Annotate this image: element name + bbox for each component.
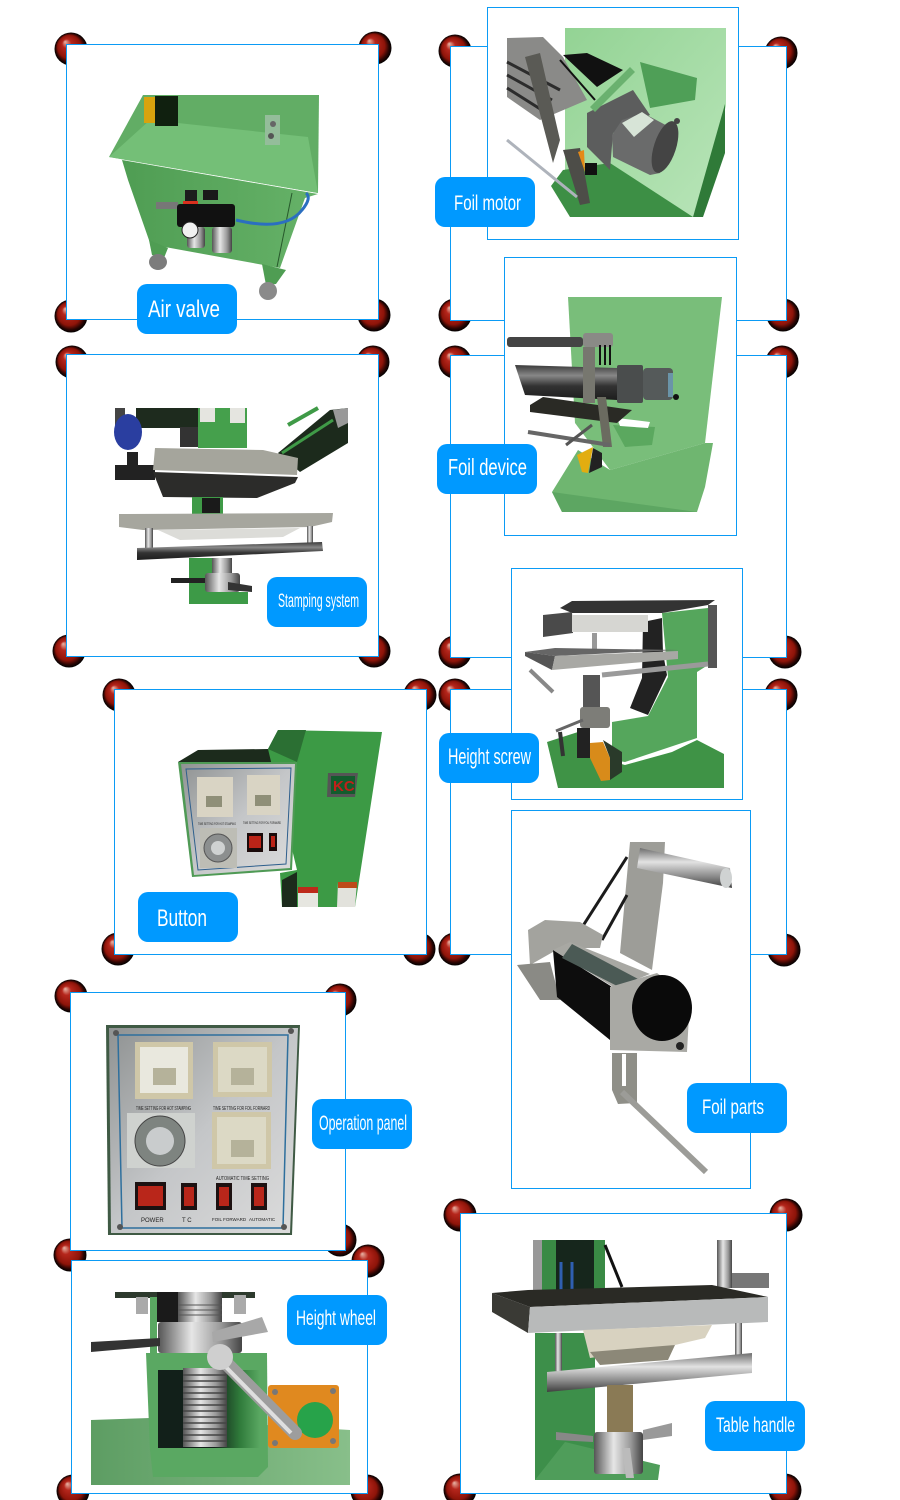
photo: control panel: AUTOMATIC bbox=[249, 1217, 276, 1222]
panel: table handle bbox=[444, 1198, 805, 1500]
label: button bbox=[138, 892, 238, 942]
photo: table handle bbox=[492, 1240, 769, 1480]
photo: air valve cabinet bbox=[109, 95, 319, 300]
panel: height screw backing bbox=[438, 678, 800, 966]
photo: control box: TIME SETTING FOR HOT STAMPING bbox=[198, 822, 236, 826]
label: operation panel: Operation panel bbox=[319, 1112, 407, 1135]
label: stamping system: Stamping system bbox=[278, 591, 359, 612]
photo: height wheel bbox=[91, 1292, 350, 1485]
photo: control box bbox=[178, 730, 382, 907]
label: height wheel bbox=[287, 1295, 387, 1345]
photo: foil parts bbox=[517, 842, 732, 1172]
photo: control panel: FOIL FORWARD bbox=[212, 1217, 247, 1222]
label: foil motor: Foil motor bbox=[454, 192, 521, 215]
label: stamping system bbox=[267, 577, 367, 627]
panel: foil device backing bbox=[438, 346, 802, 668]
label: foil device: Foil device bbox=[448, 454, 527, 480]
photo: foil motor bbox=[507, 28, 726, 217]
label: table handle: Table handle bbox=[716, 1414, 795, 1437]
label: foil parts bbox=[687, 1083, 787, 1133]
photo: control panel bbox=[106, 1025, 300, 1235]
panel: height wheel bbox=[56, 1244, 387, 1500]
photo: control panel: AUTOMATIC TIME SETTING bbox=[216, 1176, 269, 1182]
panel: foil device bbox=[437, 258, 736, 536]
panel: air valve bbox=[54, 32, 392, 334]
photo: stamping system bbox=[114, 408, 348, 604]
label: table handle bbox=[705, 1401, 805, 1451]
label: button: Button bbox=[157, 905, 207, 932]
photo: control box: TIME SETTING FOR FOIL FORWARD bbox=[243, 821, 281, 825]
label: height screw bbox=[439, 733, 539, 783]
label: air valve bbox=[137, 284, 237, 334]
photo: control panel: POWER bbox=[141, 1218, 164, 1224]
photo: height screw bbox=[525, 600, 724, 788]
label: operation panel bbox=[312, 1099, 412, 1149]
panel: button bbox=[102, 678, 436, 966]
panel: foil parts bbox=[512, 810, 787, 1188]
label: foil parts: Foil parts bbox=[702, 1096, 764, 1119]
label: foil motor bbox=[435, 177, 535, 227]
photo: control panel: T C bbox=[182, 1218, 192, 1224]
panel: foil motor backing bbox=[438, 34, 800, 332]
photo: control panel: TIME SETTING FOR FOIL FORWARD bbox=[213, 1106, 270, 1112]
panel: height screw bbox=[439, 568, 742, 800]
photo: foil device bbox=[507, 297, 722, 512]
label: height wheel: Height wheel bbox=[296, 1307, 376, 1330]
panel: operation panel bbox=[54, 980, 412, 1272]
photo: control box: KC bbox=[333, 778, 355, 795]
label: foil device bbox=[437, 444, 537, 494]
label: height screw: Height screw bbox=[448, 744, 531, 769]
label: air valve: Air valve bbox=[148, 296, 220, 323]
panel: stamping system bbox=[52, 346, 390, 668]
panel: foil motor bbox=[435, 8, 738, 240]
photo: control panel: TIME SETTING FOR HOT STAMPING bbox=[136, 1106, 191, 1112]
